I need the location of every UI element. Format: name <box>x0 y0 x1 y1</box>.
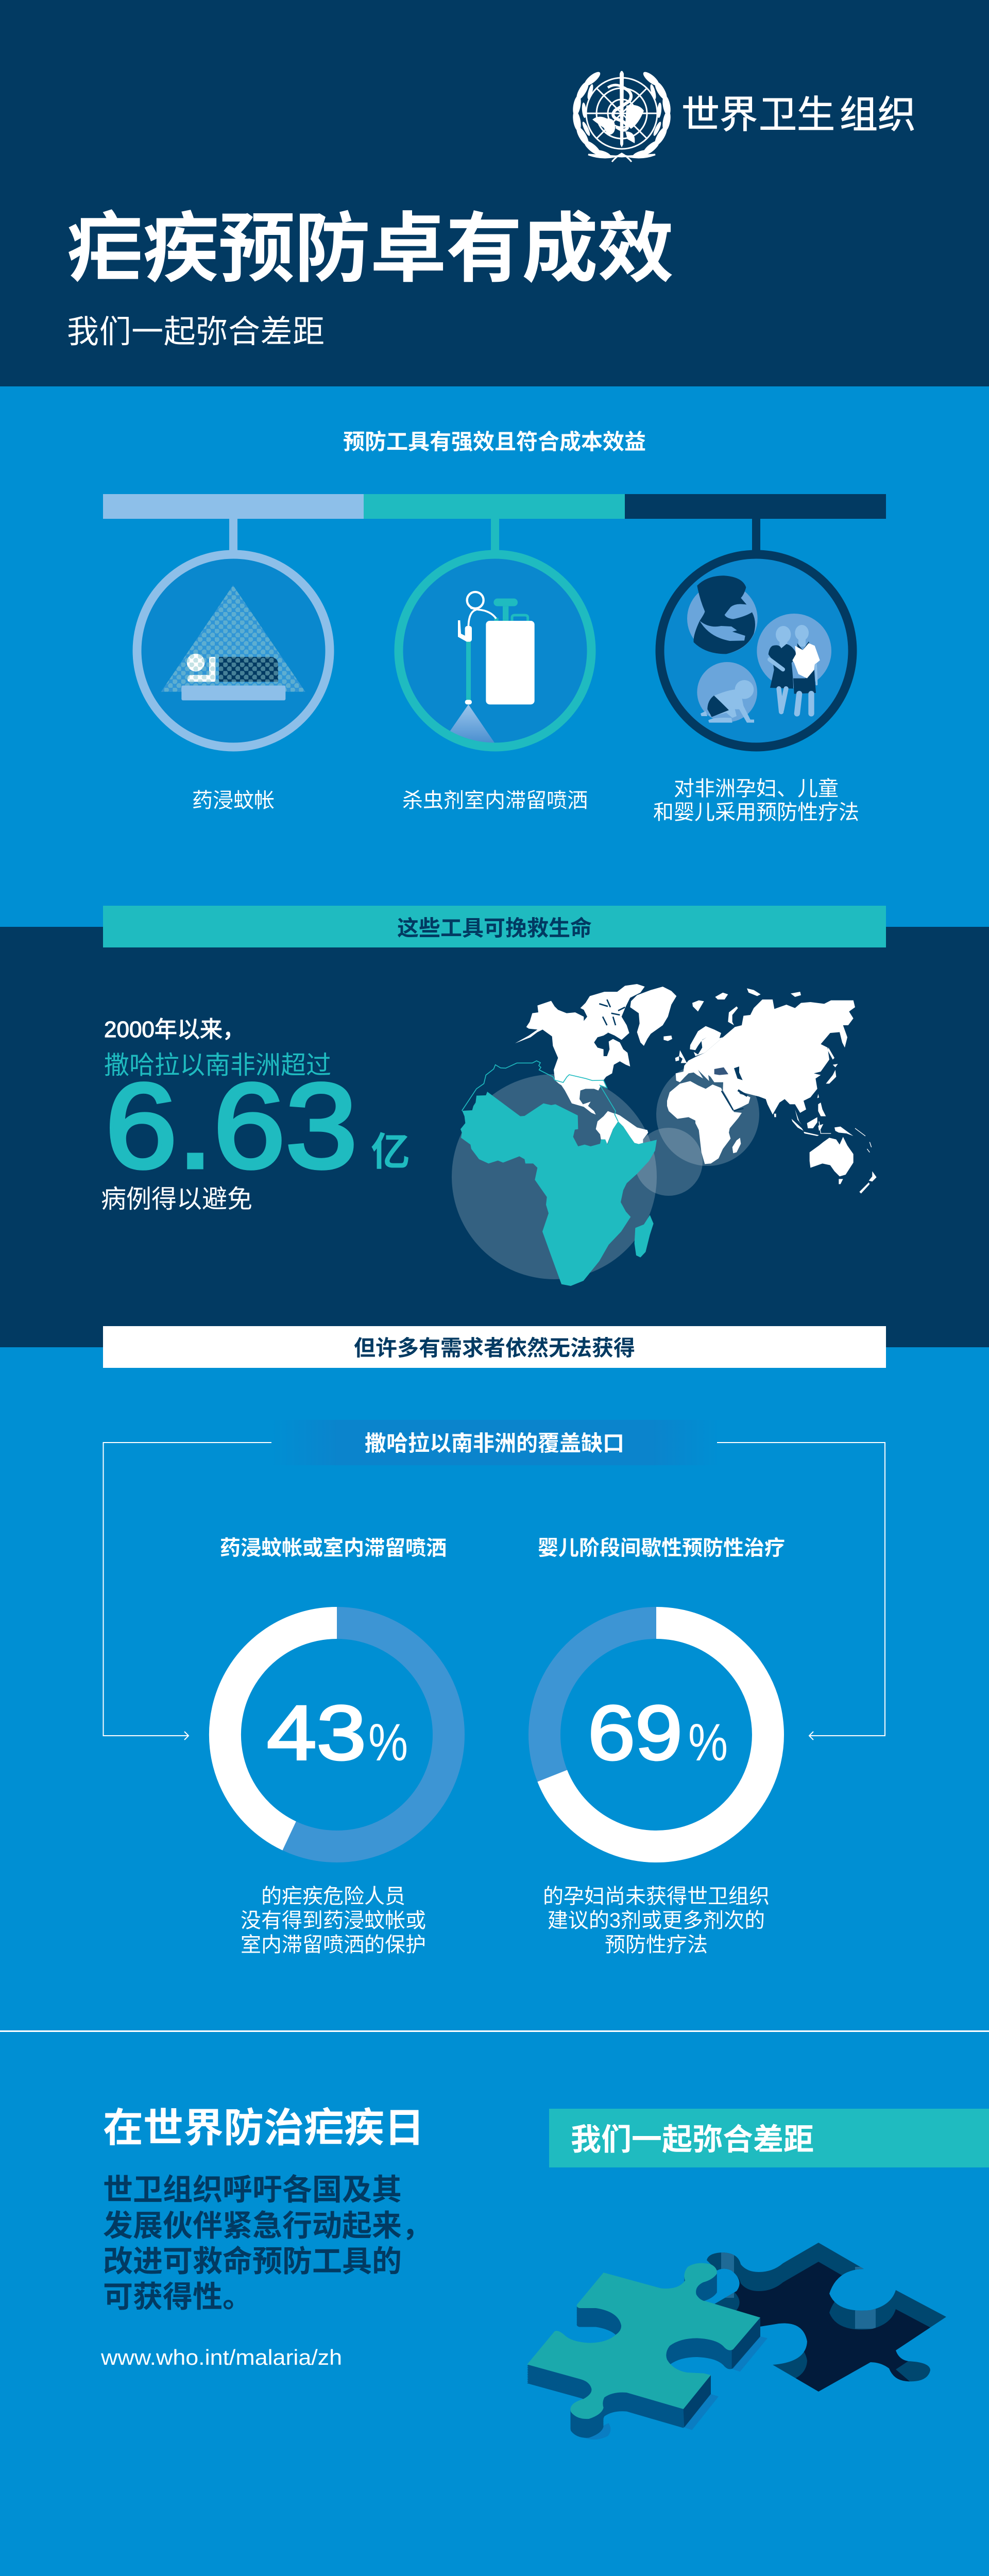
donut: infant preventive therapy 69%: % <box>688 1713 728 1772</box>
icon: pregnant woman, children, infant <box>687 575 831 723</box>
tricolour bar <box>103 494 886 519</box>
WHO wordmark: 组织 <box>840 93 916 136</box>
donut: nets or spraying 43%: 药浸蚊帐或室内滞留喷洒 <box>220 1537 447 1560</box>
label: 杀虫剂室内滞留喷洒 <box>402 789 588 812</box>
puzzle piece <box>527 2263 768 2439</box>
icon: WHO emblem <box>572 70 672 162</box>
icon: person sleeping under net <box>161 585 305 700</box>
banner: many still lack access: 但许多有需求者依然无法获得 <box>354 1336 635 1360</box>
label <box>653 777 859 824</box>
banner: tools save lives <box>103 906 886 947</box>
donut: infant preventive therapy 69%: 建议的3剂或更多剂次的 <box>548 1909 765 1932</box>
arrow: left connector <box>103 1443 271 1740</box>
Americas and Greenland <box>515 984 676 1145</box>
statistic: 663 million cases averted: 亿 <box>371 1130 410 1174</box>
coverage gaps heading: 撒哈拉以南非洲的覆盖缺口 <box>365 1431 624 1455</box>
sub-Saharan Africa enlarged <box>461 1061 657 1286</box>
tool 2: indoor residual spraying <box>399 519 591 812</box>
call to action text: 世卫组织呼吁各国及其 <box>103 2173 402 2207</box>
tool 1: insecticide-treated net <box>137 519 330 812</box>
call to action text: 改进可救命预防工具的 <box>103 2245 402 2278</box>
donut: infant preventive therapy 69%: 的孕妇尚未获得世卫组织 <box>543 1885 770 1908</box>
statistic: 663 million cases averted <box>101 1017 410 1213</box>
statistic: 663 million cases averted: 撒哈拉以南非洲超过 <box>104 1052 331 1079</box>
donut: nets or spraying 43%: 没有得到药浸蚊帐或 <box>241 1909 426 1932</box>
call to action text: 发展伙伴紧急行动起来， <box>103 2209 432 2243</box>
donut: nets or spraying 43%: 室内滞留喷洒的保护 <box>241 1934 426 1956</box>
banner: close the gap: 我们一起弥合差距 <box>571 2123 814 2157</box>
donut: nets or spraying 43%: 的疟疾危险人员 <box>261 1885 405 1908</box>
tool 3: preventive therapies <box>653 519 859 824</box>
WHO wordmark: 世界 <box>681 93 758 136</box>
label: 和婴儿采用预防性疗法 <box>653 801 859 824</box>
banner: tools save lives: 这些工具可挽救生命 <box>397 916 592 940</box>
subtitle: 我们一起弥合差距 <box>67 314 325 350</box>
donut: infant preventive therapy 69% <box>538 1537 785 1956</box>
arrow: right connector <box>717 1443 885 1740</box>
magnifying bubbles <box>452 1063 759 1279</box>
call to action text: 在世界防治疟疾日 <box>103 2105 424 2150</box>
statistic: 663 million cases averted: 2000年以来， <box>104 1017 245 1042</box>
section heading: tools: 预防工具有强效且符合成本效益 <box>343 430 646 454</box>
label: 药浸蚊帐 <box>192 789 275 812</box>
call to action text: www.who.int/malaria/zh <box>100 2345 342 2369</box>
donut: infant preventive therapy 69%: 婴儿阶段间歇性预防性治疗 <box>538 1537 785 1560</box>
statistic: 663 million cases averted: 病例得以避免 <box>101 1185 252 1213</box>
world map with Africa enlarged <box>452 984 877 1286</box>
call to action text: 可获得性。 <box>103 2280 252 2314</box>
header panel <box>0 0 989 386</box>
icon: sprayer <box>450 592 535 743</box>
dark panel: lives saved <box>0 927 989 1347</box>
donut: nets or spraying 43% <box>220 1537 449 1956</box>
banner: close the gap <box>549 2109 989 2167</box>
Eurasia, Africa, Oceania <box>667 988 877 1194</box>
puzzle hole <box>707 2243 946 2392</box>
donut: infant preventive therapy 69%: 69 <box>588 1689 683 1776</box>
WHO wordmark <box>681 93 916 136</box>
donut: nets or spraying 43%: 43 <box>267 1689 366 1776</box>
donut: infant preventive therapy 69%: 预防性疗法 <box>605 1934 708 1956</box>
banner: many still lack access <box>103 1326 886 1368</box>
title: 疟疾预防卓有成效 <box>67 207 674 292</box>
WHO wordmark: 卫生 <box>759 93 835 136</box>
label: 对非洲孕妇、儿童 <box>674 777 839 800</box>
statistic: 663 million cases averted: 6.63 <box>105 1058 357 1193</box>
puzzle illustration <box>527 2243 946 2439</box>
donut: nets or spraying 43%: % <box>368 1713 408 1772</box>
coverage gaps heading <box>271 1420 719 1465</box>
call to action text <box>100 2105 432 2369</box>
